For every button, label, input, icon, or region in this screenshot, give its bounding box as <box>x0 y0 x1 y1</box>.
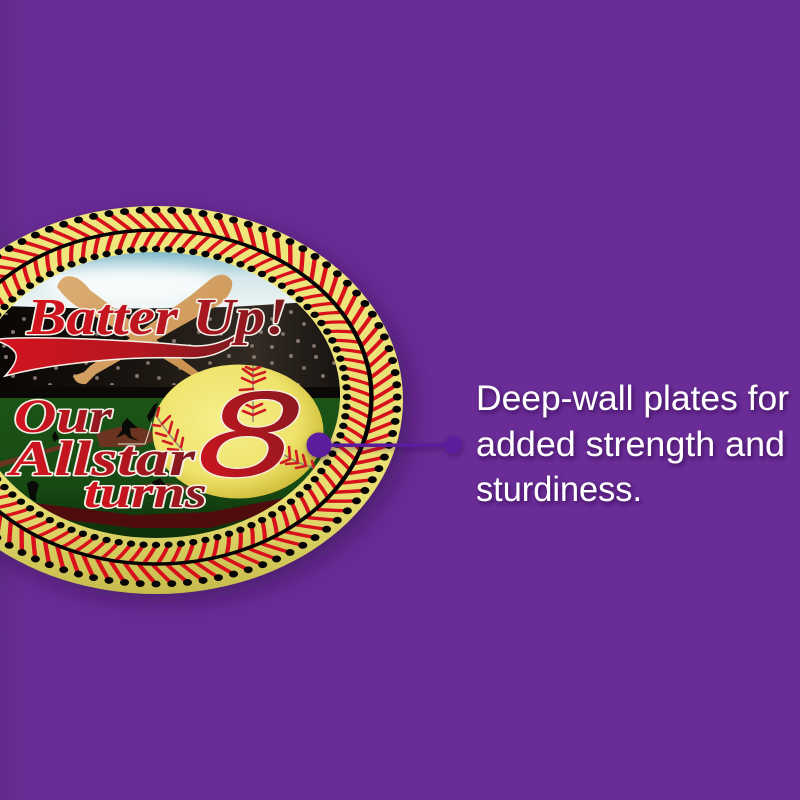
heading: Batter Up!: Batter Up! <box>26 289 288 346</box>
text: turns: turns <box>84 468 207 517</box>
baseball stitching <box>0 113 485 713</box>
bat two <box>73 275 232 384</box>
callout end dot <box>444 436 462 454</box>
callout text: sturdiness. <box>476 470 642 509</box>
stadium stands <box>0 302 350 402</box>
grass field <box>0 398 350 543</box>
plate shadow <box>0 214 411 602</box>
callout connector <box>306 432 462 458</box>
ball seam right <box>280 446 315 470</box>
text: Our: Our <box>14 390 114 443</box>
number 8: 8 <box>188 366 307 502</box>
text: Allstar: Allstar <box>6 430 196 486</box>
callout text: added strength and <box>476 425 785 464</box>
infield dirt <box>0 422 285 528</box>
banner swoosh <box>0 333 238 376</box>
ball seam left <box>153 408 184 452</box>
callout text: Deep-wall plates for <box>476 379 789 418</box>
plate <box>0 206 403 594</box>
callout line <box>319 444 453 447</box>
bat one <box>57 276 200 378</box>
callout start dot <box>306 432 332 458</box>
softball <box>152 364 324 498</box>
callout text <box>476 379 789 509</box>
sky <box>8 252 304 310</box>
plate rim <box>0 206 403 594</box>
ball seam top <box>240 366 265 422</box>
player silhouettes <box>27 402 168 502</box>
plate centre scene <box>0 250 350 543</box>
